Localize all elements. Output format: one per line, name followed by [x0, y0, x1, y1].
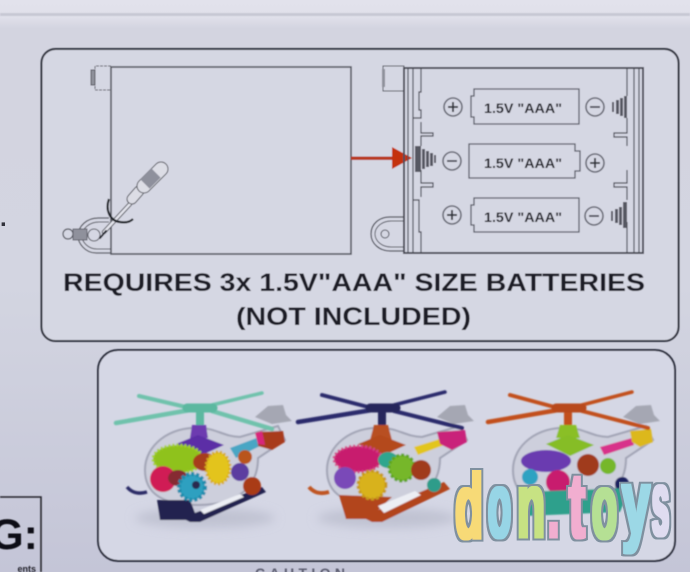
arrow: red [351, 147, 412, 169]
battery requirement text [63, 269, 645, 331]
battery row 2 [443, 144, 604, 178]
watermark: don.toys: t [569, 455, 585, 557]
watermark: don.toys: y [622, 452, 650, 554]
battery row 2: 1.5V "AAA" [484, 155, 562, 171]
watermark: don.toys: o [488, 455, 511, 557]
panel: battery instructions [42, 49, 678, 341]
watermark: don.toys: . [548, 455, 559, 557]
watermark: don.toys: o [592, 456, 617, 558]
battery tab [383, 66, 404, 91]
helicopter: navy rotor [298, 392, 474, 528]
rotor blades [298, 392, 462, 428]
text fragment: period: . [0, 205, 7, 232]
watermark: don.toys: n [517, 455, 545, 557]
right springs [611, 96, 627, 228]
rotor blades [116, 393, 272, 429]
left spring [415, 146, 436, 172]
icon: rotation arrow [108, 199, 133, 222]
battery row 3 [443, 198, 603, 232]
battery requirement text: REQUIRES 3x 1.5V"AAA" SIZE BATTERIES [63, 269, 645, 297]
icon: screwdriver [100, 169, 161, 238]
rotor blades [488, 392, 648, 428]
battery compartment diagram [371, 66, 643, 253]
watermark: don.toys: d [455, 456, 483, 558]
watermark: don.toys [455, 452, 669, 558]
icon: screw mount [63, 218, 111, 253]
helicopter: teal rotor [116, 393, 292, 528]
battery row 1: 1.5V "AAA" [484, 100, 562, 116]
battery cover diagram [63, 66, 351, 254]
warning box fragment [0, 497, 41, 572]
battery requirement text: (NOT INCLUDED) [236, 303, 471, 331]
helicopter: orange rotor [488, 392, 660, 516]
battery row 3: 1.5V "AAA" [484, 209, 562, 225]
battery row 1 [444, 89, 604, 124]
icon: mounting loop [371, 217, 404, 251]
panel: helicopter colours [98, 350, 675, 561]
